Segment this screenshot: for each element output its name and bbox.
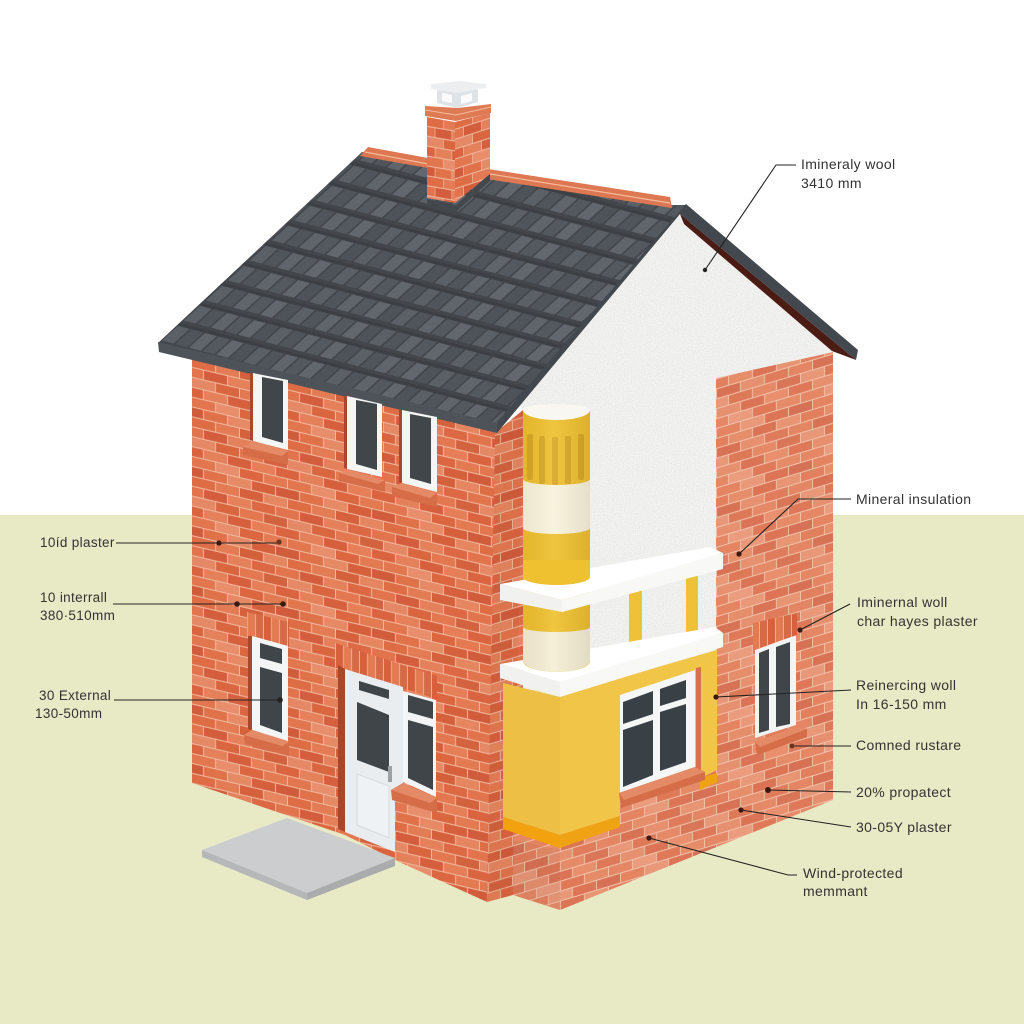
lower left lintel: [247, 612, 289, 647]
bay orange base: [503, 773, 717, 848]
white plaster gable: [515, 208, 833, 690]
callout: left internal: 10 interrall: [40, 590, 107, 605]
callout: plaster: [738, 807, 952, 835]
callout: left external: 130-50mm: [35, 706, 102, 721]
callout: internal wall plaster: char hayes plaster: [857, 613, 978, 629]
right brick wall: [487, 352, 833, 910]
callout: combined render: Comned rustare: [856, 737, 961, 753]
upper white shelf: [500, 547, 723, 612]
lower white shelf: [500, 627, 723, 697]
callout: left external: 30 External: [39, 688, 111, 703]
cylinder cream band: [523, 479, 590, 534]
door lower panel: [357, 774, 389, 838]
callout: wind-protected membrane: [646, 835, 903, 899]
cylinder cap: [523, 404, 590, 420]
bargeboard: [497, 204, 858, 433]
callout: plaster: 30-05Y plaster: [856, 819, 952, 835]
right wall window: [755, 635, 807, 755]
bay brick reveal: [696, 667, 701, 776]
upper middle window: [339, 396, 385, 492]
door step: [202, 818, 395, 900]
chimney: [425, 81, 491, 212]
cylinder shading: [523, 410, 590, 672]
callout: left plaster: 10íd plaster: [40, 535, 115, 550]
yellow render bay: [503, 650, 717, 848]
callout: propatect: [765, 784, 951, 800]
callout: reinforcing wall: [713, 677, 956, 712]
cylinder yellow front over shelf: [523, 560, 590, 585]
cylinder lower cream band: [523, 627, 590, 672]
left brick wall: [192, 358, 497, 902]
callout: mineral insulation: Mineral insulation: [856, 491, 971, 507]
callout: top right: [703, 156, 896, 272]
ground background: [0, 515, 1024, 1024]
callout: internal wall plaster: [797, 594, 978, 633]
balcony posts: [629, 573, 698, 656]
upper right window: [392, 410, 437, 507]
callout: internal wall plaster: Iminernal woll: [857, 594, 948, 610]
roof tiles: [158, 152, 686, 430]
door glazing: [357, 702, 389, 772]
lower left window: [244, 636, 289, 756]
callout: left plaster: [40, 535, 282, 550]
callout: left external: [35, 688, 283, 721]
callout: propatect: 20% propatect: [856, 784, 951, 800]
insulation cylinder: [523, 404, 590, 672]
cylinder fluted band: [527, 434, 584, 485]
roof: [158, 147, 858, 433]
upper left window: [243, 373, 288, 465]
callout: reinforcing wall: In 16-150 mm: [856, 696, 947, 712]
callout: top right: Imineraly wool: [801, 156, 896, 172]
door lintel: [335, 643, 437, 699]
callout: top right: 3410 mm: [801, 175, 862, 191]
door: [338, 665, 403, 852]
chimney brick faces: [427, 117, 455, 203]
callout: left internal: [40, 590, 286, 623]
callout: mineral insulation: [736, 491, 971, 557]
house illustration: [158, 81, 858, 910]
callout: combined render: [790, 737, 961, 753]
callout: wind-protected membrane: Wind-protected: [803, 865, 903, 881]
bay window: [619, 670, 705, 808]
ridge tiles: [360, 147, 672, 208]
bay front face: [560, 650, 717, 835]
roof fascia: [158, 342, 497, 433]
callout: wind-protected membrane: memmant: [803, 883, 868, 899]
door side window: [391, 691, 437, 813]
callout: reinforcing wall: Reinercing woll: [856, 677, 956, 693]
bay left face: [503, 683, 560, 835]
callout: left internal: 380·510mm: [40, 608, 115, 623]
chimney pot: [431, 81, 486, 108]
cylinder base: [523, 410, 590, 672]
chimney cap: [425, 104, 491, 121]
chimney flashing: [427, 173, 490, 212]
door handle: [388, 766, 392, 782]
right window lintel: [753, 613, 797, 650]
